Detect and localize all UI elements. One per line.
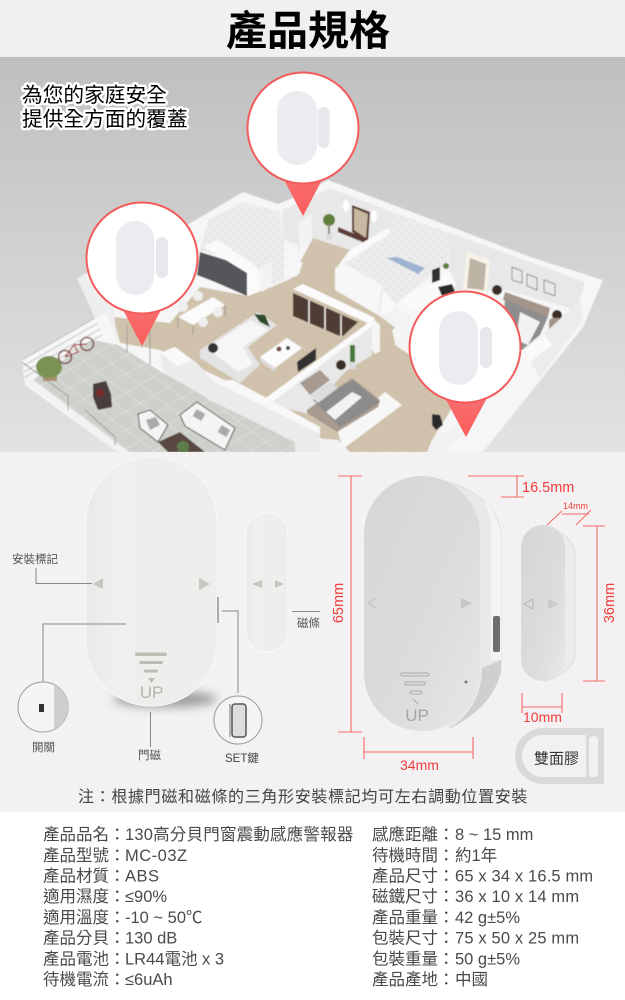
dimension: width 10mm xyxy=(522,693,562,725)
spec list: left column: LR44電池 x 3 xyxy=(125,950,224,968)
dimension: depth 14mm xyxy=(547,501,591,525)
label: magnetic strip xyxy=(292,612,320,630)
spec list: right column: 產品尺寸： xyxy=(372,868,454,886)
diagram: door sensor parts xyxy=(12,457,320,765)
detail: power switch xyxy=(18,624,126,754)
magnet angled view xyxy=(521,525,575,681)
spec list: left column xyxy=(43,824,354,989)
label: door sensor xyxy=(138,712,161,762)
icon: double-sided adhesive xyxy=(515,728,604,784)
spec list: right column: 50 g±5% xyxy=(455,950,520,968)
diagram: magnet dimensions xyxy=(521,501,618,725)
spec list: right column: 產品產地： xyxy=(372,971,454,989)
spec list: left column: 產品型號： xyxy=(43,847,126,865)
spec list: right column: 36 x 10 x 14 mm xyxy=(455,888,579,906)
panel: specification list xyxy=(0,812,625,1000)
dimension: depth 14mm: 14mm xyxy=(563,501,588,511)
spec list: right column: 感應距離： xyxy=(372,826,454,844)
pin: top door sensor xyxy=(248,72,358,216)
callout text: coverage message xyxy=(22,84,188,131)
detail: SET button xyxy=(214,611,262,765)
main sensor front: UP xyxy=(140,683,163,702)
spec list: left column: 產品品名： xyxy=(43,826,126,844)
label: installation mark: 安裝標記 xyxy=(12,552,58,566)
magnet strip front xyxy=(246,513,288,652)
panel: home coverage illustration xyxy=(0,58,625,453)
callout text: coverage message: 提供全方面的覆蓋 xyxy=(22,108,188,131)
spec list: left column: 適用溫度： xyxy=(43,909,126,927)
pin: balcony door sensor xyxy=(86,202,198,346)
spec list: right column: 包裝重量： xyxy=(372,950,454,968)
spec list: left column: 產品材質： xyxy=(43,868,126,886)
spec list: left column: -10 ~ 50℃ xyxy=(125,909,203,927)
spec list: right column: 包裝尺寸： xyxy=(372,930,454,948)
heading: product specifications: 產品規格 xyxy=(226,8,390,54)
spec list: right column: 約1年 xyxy=(455,846,497,865)
panel: product parts and dimensions xyxy=(0,452,625,812)
spec list: left column: 130 dB xyxy=(125,930,177,948)
spec list: left column: ABS xyxy=(125,868,160,886)
diagram: main sensor dimensions xyxy=(331,476,574,773)
dimension: width 10mm: 10mm xyxy=(523,709,562,725)
spec list: right column: 75 x 50 x 25 mm xyxy=(455,930,579,948)
detail: power switch: 開關 xyxy=(32,741,55,754)
callout text: coverage message: 為您的家庭安全 xyxy=(22,84,167,107)
spec list: left column: 產品電池： xyxy=(43,950,126,968)
spec list: left column: ≤6uAh xyxy=(125,971,173,989)
dimension: height 36mm xyxy=(583,526,618,681)
main sensor front xyxy=(86,457,219,706)
main sensor angled view: UP xyxy=(405,706,429,725)
dimension: thickness 16.5mm: 16.5mm xyxy=(522,480,574,496)
spec list: right column: 磁鐵尺寸： xyxy=(372,888,454,906)
pin: bedroom window sensor xyxy=(410,292,520,437)
dimension: width 34mm: 34mm xyxy=(400,757,439,773)
dimension: height 65mm xyxy=(331,476,362,732)
label: door sensor: 門磁 xyxy=(138,748,161,762)
spec list: right column: 42 g±5% xyxy=(455,909,520,927)
spec list: right column xyxy=(372,824,593,989)
dimension: thickness 16.5mm xyxy=(468,476,574,497)
dimension: height 65mm: 65mm xyxy=(331,583,347,623)
spec list: left column: 適用濕度： xyxy=(43,888,126,906)
spec list: left column: MC-03Z xyxy=(125,847,188,865)
spec list: left column: 130高分貝門窗震動感應警報器 xyxy=(125,824,354,844)
floor plan xyxy=(22,180,603,453)
title band xyxy=(0,0,625,58)
installation note: 注：根據門磁和磁條的三角形安裝標記均可左右調動位置安裝 xyxy=(78,788,528,806)
spec list: right column: 65 x 34 x 16.5 mm xyxy=(455,868,593,886)
label: magnetic strip: 磁條 xyxy=(297,616,320,630)
spec list: left column: 產品分貝： xyxy=(43,930,126,948)
icon: double-sided adhesive: 雙面膠 xyxy=(534,750,579,768)
spec list: right column: 中國 xyxy=(455,970,488,989)
main sensor angled view xyxy=(364,476,501,731)
detail: SET button: SET鍵 xyxy=(225,751,259,765)
spec list: right column: 待機時間： xyxy=(372,847,454,865)
dimension: width 34mm xyxy=(364,737,473,773)
spec list: right column: 8 ~ 15 mm xyxy=(455,826,533,844)
spec list: left column: ≤90% xyxy=(125,888,167,906)
spec list: right column: 產品重量： xyxy=(372,909,454,927)
label: installation mark xyxy=(12,552,92,584)
spec list: left column: 待機電流： xyxy=(43,971,126,989)
dimension: height 36mm: 36mm xyxy=(602,583,618,623)
